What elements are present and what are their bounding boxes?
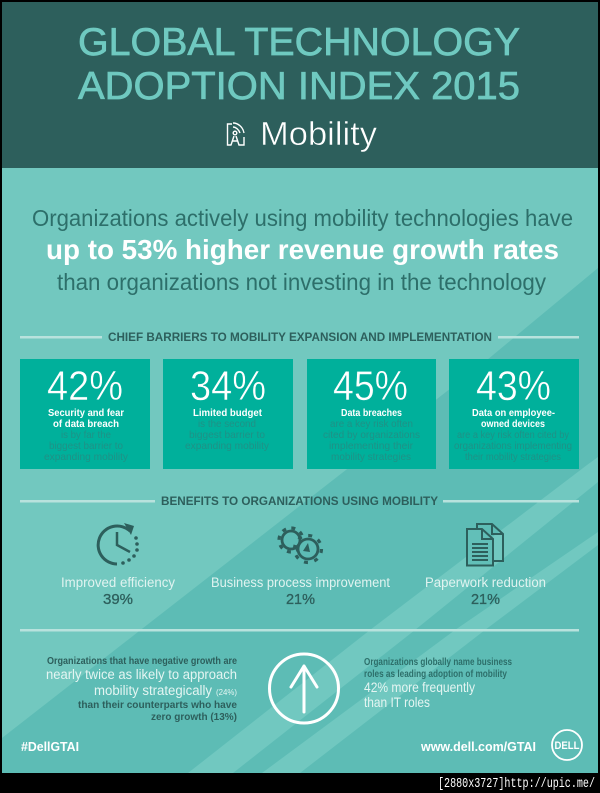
intro statement [32, 205, 573, 295]
text block: negative growth: Organizations that have negative growth are [47, 655, 237, 667]
benefit: paperwork reduction [425, 524, 546, 608]
panel: 42% barrier [20, 359, 150, 469]
panel: 42% barrier: of data breach [53, 418, 119, 430]
benefit: business process improvement [211, 528, 390, 608]
title: GLOBAL TECHNOLOGY [78, 21, 520, 64]
benefit: paperwork reduction: 21% [471, 592, 500, 608]
intro statement: up to 53% higher revenue growth rates [46, 234, 559, 265]
intro statement: than organizations not investing in the technology [57, 269, 546, 295]
heading: benefits: BENEFITS TO ORGANIZATIONS USING MOBILITY [161, 496, 438, 508]
panel: 42% barrier: expanding mobility [44, 451, 129, 463]
text block: negative growth [46, 655, 237, 723]
benefit: improved efficiency [61, 523, 175, 608]
panel: 34% barrier: expanding mobility [185, 440, 270, 452]
text block: negative growth: mobility strategically [94, 683, 212, 698]
panel: 43% barrier: are a key risk often cited by [457, 429, 570, 441]
benefit: improved efficiency: 39% [103, 592, 133, 608]
panel: 45% barrier: 45% [333, 362, 408, 409]
title: ADOPTION INDEX 2015 [78, 65, 520, 108]
panel: 45% barrier [307, 359, 436, 469]
benefit: paperwork reduction: Paperwork reduction [425, 575, 546, 590]
panel: 42% barrier: is by far the [61, 429, 111, 441]
panel: 45% barrier: Data breaches [341, 407, 402, 419]
panel: 34% barrier: is the second [198, 418, 256, 430]
text block: business roles: roles as leading adoption of mobility [364, 668, 507, 680]
heading: chief barriers: CHIEF BARRIERS TO MOBILITY EXPANSION AND IMPLEMENTATION [108, 332, 492, 344]
panel: 43% barrier [449, 359, 579, 469]
text block: business roles: than IT roles [364, 694, 430, 710]
panel: 43% barrier: their mobility strategies [465, 451, 561, 463]
subtitle: Mobility: Mobility [260, 115, 378, 152]
hashtag: #DellGTAI [21, 739, 79, 754]
benefit: business process improvement: Business process improvement [211, 575, 390, 590]
panel: 45% barrier: cited by organizations [323, 429, 420, 441]
header band [2, 2, 598, 168]
text block: business roles: 42% more frequently [364, 679, 475, 695]
benefit: business process improvement: 21% [286, 592, 315, 608]
icon: Dell logo [552, 730, 582, 760]
text block: negative growth: (24%) [216, 687, 237, 697]
panel: 43% barrier: Data on employee- [472, 407, 555, 419]
panel: 45% barrier: implementing their [329, 440, 413, 452]
panel: 42% barrier: biggest barrier to [49, 440, 123, 452]
icon: documents [467, 524, 503, 566]
icon: Dell logo: DELL [554, 740, 580, 752]
panel: 43% barrier: owned devices [481, 418, 545, 430]
text block: negative growth: nearly twice as likely to approach [46, 667, 237, 682]
panel: 45% barrier: mobility strategies [331, 451, 411, 463]
text block: business roles [364, 656, 512, 710]
panel: 43% barrier: 43% [476, 362, 551, 409]
panel: 34% barrier: biggest barrier to [189, 429, 265, 441]
icon: clock [98, 523, 139, 565]
panel: 45% barrier: are a key risk often [330, 418, 413, 430]
intro statement: Organizations actively using mobility technologies have [32, 205, 573, 231]
panel: 42% barrier: Security and fear [48, 407, 124, 419]
panel: 43% barrier: organizations implementing [454, 440, 572, 452]
title [78, 21, 520, 108]
icon: up arrow in circle [270, 654, 338, 723]
website url: www.dell.com/GTAI [420, 739, 536, 754]
text block: negative growth: than their counterparts who have [78, 699, 237, 711]
icon: mobility [228, 123, 244, 145]
panel: 34% barrier [163, 359, 293, 469]
panel: 34% barrier: Limited budget [193, 407, 262, 419]
panel: 34% barrier: 34% [190, 362, 266, 409]
icon: gears [279, 528, 322, 562]
text block: business roles: Organizations globally name business [364, 656, 512, 668]
text block: negative growth: zero growth (13%) [151, 711, 237, 723]
benefit: improved efficiency: Improved efficiency [61, 575, 175, 590]
panel: 42% barrier: 42% [47, 362, 123, 409]
